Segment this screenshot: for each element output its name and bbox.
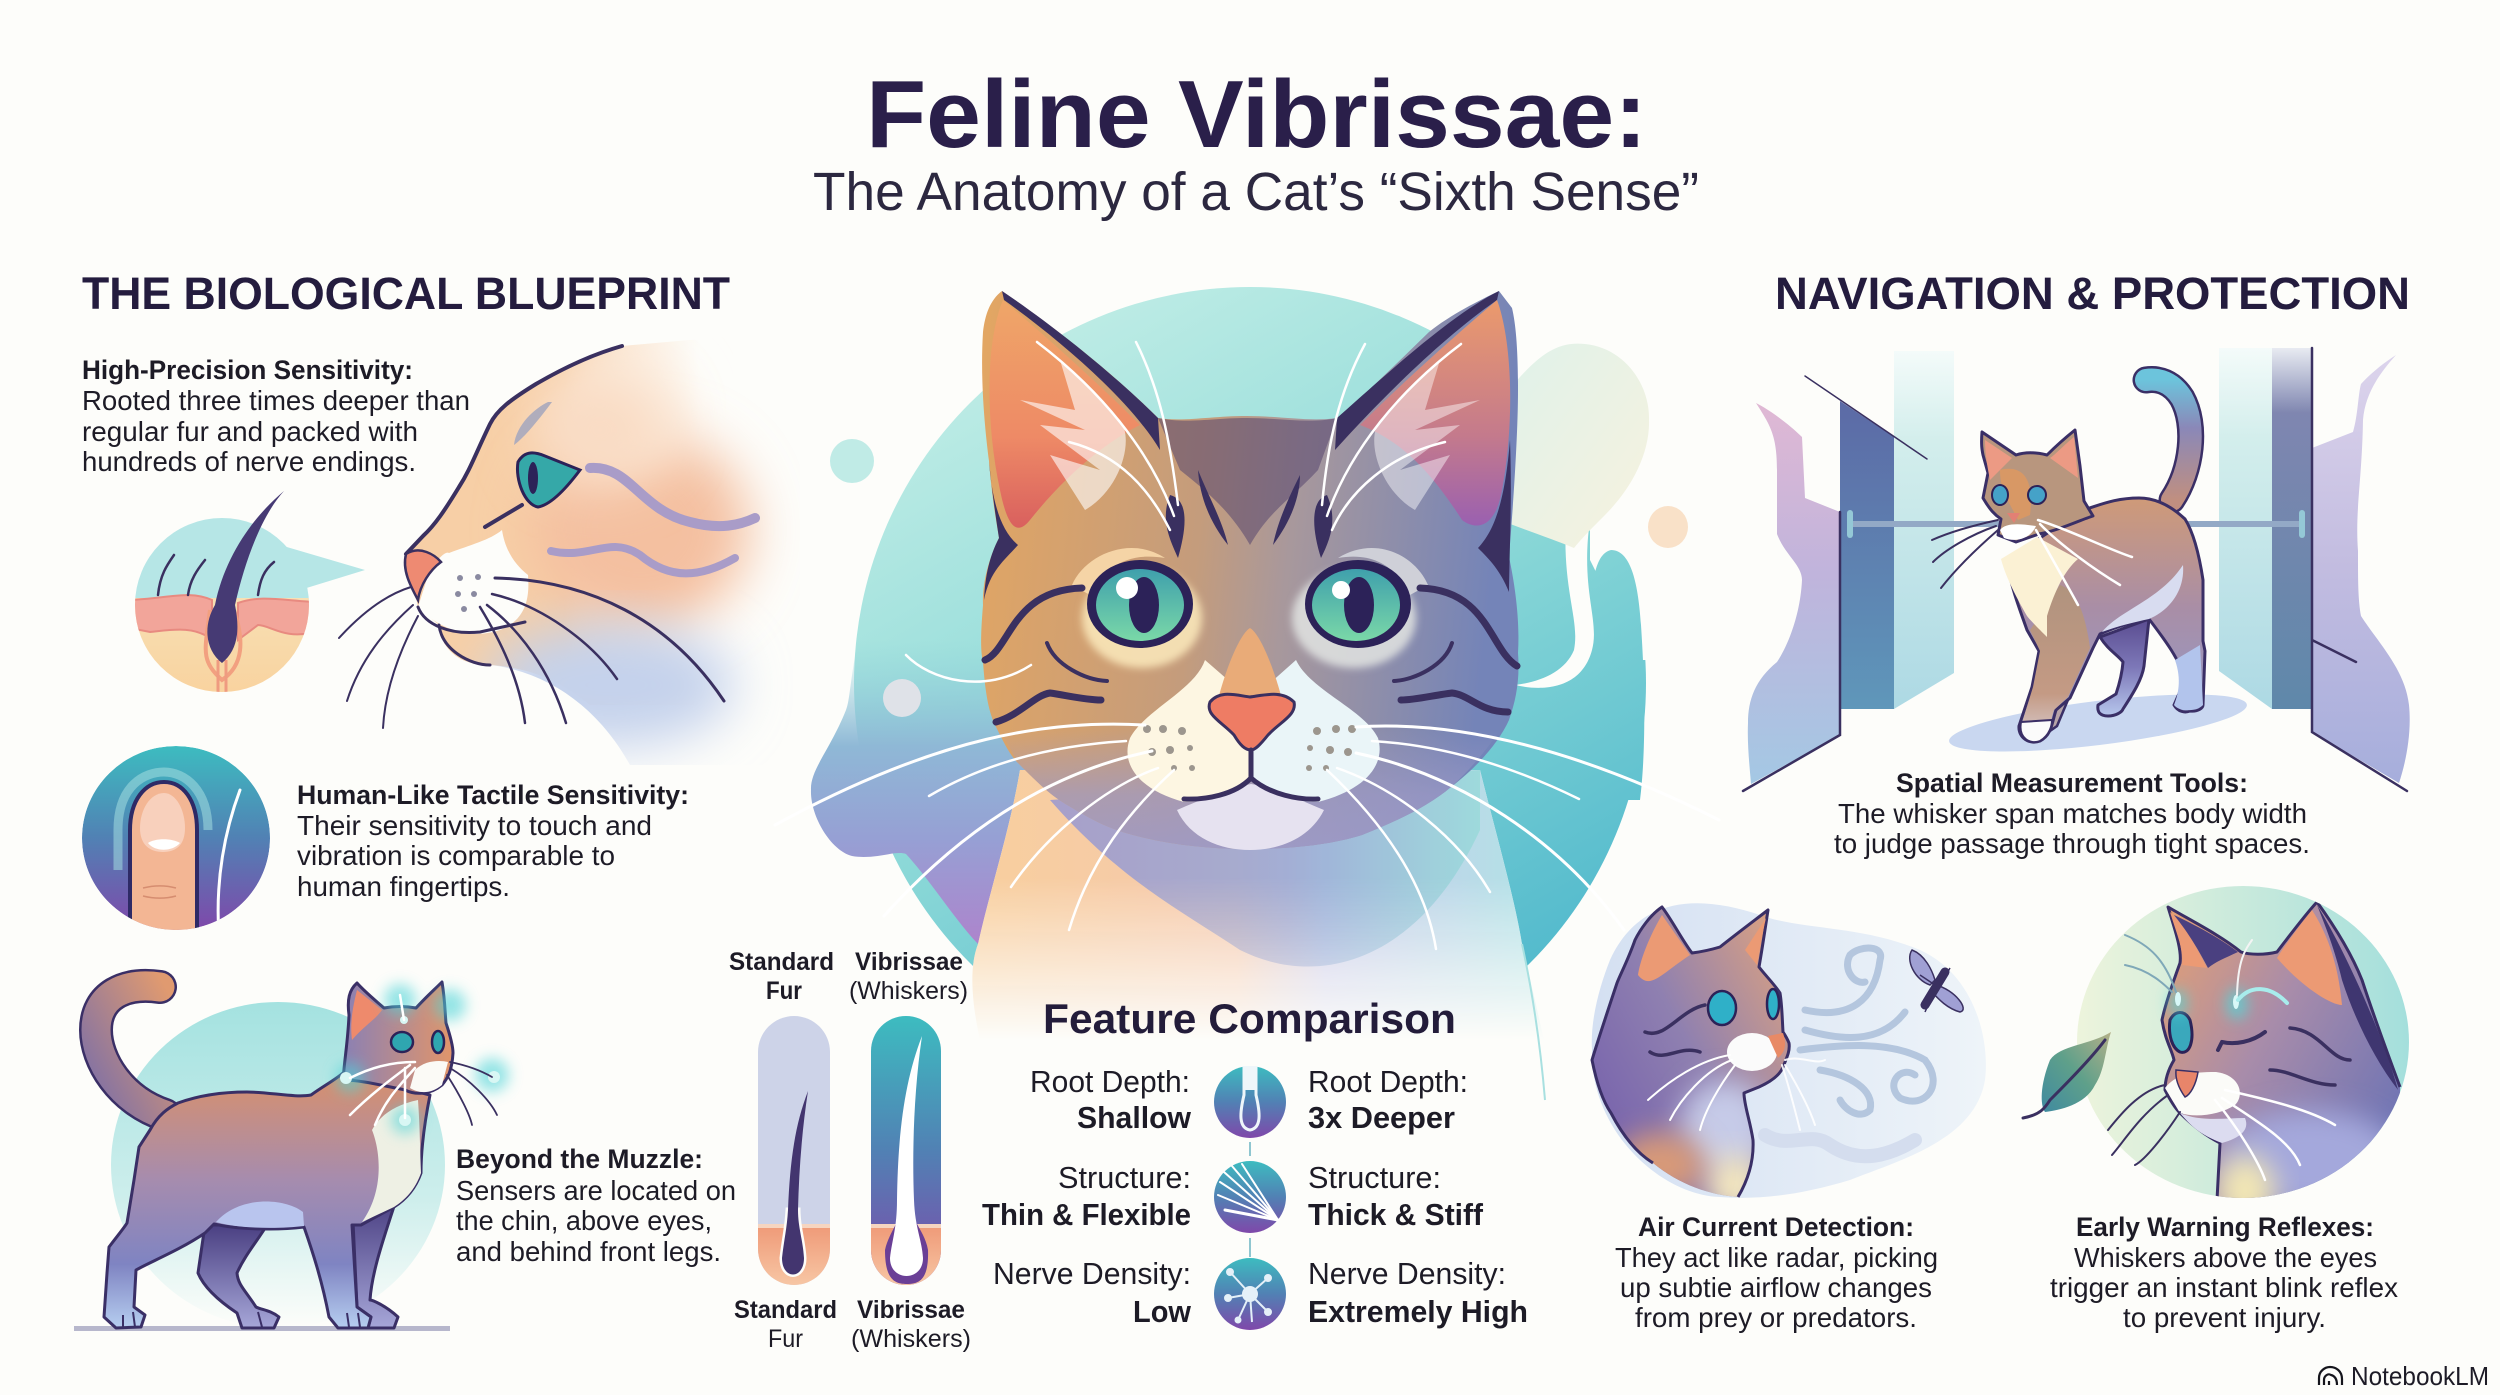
head: [1982, 430, 2093, 542]
text block: high-precision sensitivity: regular fur and packed with: [82, 416, 418, 447]
nose: [2007, 513, 2020, 523]
muzzle white: [418, 530, 528, 634]
row: structure: Thick & Stiff: [1308, 1197, 1484, 1232]
tail: [2146, 380, 2191, 500]
chest cream: [2001, 537, 2078, 637]
left ear dark: [2174, 915, 2238, 968]
icon: whisker root cross-section: [130, 491, 365, 698]
heading: feature comparison: Feature Comparison: [1043, 995, 1456, 1042]
text block: human-like tactile sensitivity: vibration is comparable to: [297, 840, 615, 871]
whiskers: [350, 995, 415, 1125]
bottom labels: [734, 1296, 971, 1353]
row: nerve density: Nerve Density:: [993, 1256, 1191, 1291]
nose bridge: [1216, 628, 1284, 708]
text block: early warning reflexes: [2050, 1212, 2398, 1333]
eyes: [1708, 989, 1779, 1025]
paw toes: [123, 1312, 360, 1327]
vibrissae tube: [871, 1016, 941, 1285]
text block: human-like tactile sensitivity: [297, 780, 689, 902]
far front leg: [352, 1200, 398, 1328]
head outline: [406, 346, 622, 554]
eye surrounds: [1082, 568, 1416, 668]
ears: [2170, 910, 2342, 1005]
muzzle: [1127, 660, 1380, 850]
muzzle: [2000, 524, 2036, 540]
text block: human-like tactile sensitivity: Human-Like Tactile Sensitivity:: [297, 780, 689, 810]
comparison table: [982, 1064, 1528, 1330]
background circle: [2077, 886, 2409, 1198]
illustration: cat in corridor: [1743, 348, 2410, 791]
lower face tint: [1000, 730, 1500, 849]
pale yellow blob: [1500, 344, 1649, 548]
head: [343, 982, 453, 1093]
whiskers: [1648, 1055, 1735, 1130]
face tint: [2000, 469, 2031, 520]
text block: air current detection: They act like radar, picking: [1615, 1242, 1938, 1273]
text block: spatial measurement tools: to judge passage through tight spaces.: [1834, 828, 2310, 859]
belly light: [2102, 565, 2183, 632]
row: nerve density: Extremely High: [1308, 1294, 1528, 1329]
text block: high-precision sensitivity: [82, 355, 470, 477]
heading: navigation and protection: NAVIGATION & PROTECTION: [1775, 268, 2410, 319]
head: [981, 291, 1519, 849]
text block: spatial measurement tools: [1834, 768, 2310, 859]
eyes: [391, 1031, 444, 1053]
text block: early warning reflexes: to prevent injury.: [2123, 1302, 2326, 1333]
notebooklm logo: NotebookLM: [2351, 1361, 2489, 1391]
top labels: Vibrissae: [855, 948, 963, 976]
text block: spatial measurement tools: Spatial Measurement Tools:: [1896, 768, 2248, 798]
measuring bar: [1847, 510, 2305, 538]
decorative dots: [830, 439, 1688, 717]
white channel: [1515, 520, 1594, 688]
text block: air current detection: up subtie airflow changes: [1620, 1272, 1932, 1303]
whiskers left: [1932, 520, 1998, 588]
background patch right: [1590, 340, 1670, 660]
right light column: [2219, 348, 2272, 709]
closed eye: [2218, 1032, 2265, 1050]
open eye: [2169, 1012, 2192, 1052]
hair shaft: [207, 491, 284, 663]
tail: [96, 986, 165, 1115]
ground line: [74, 1326, 450, 1331]
row: root depth: [1030, 1064, 1468, 1138]
leaf: [2023, 1032, 2111, 1118]
text block: human-like tactile sensitivity: Their sensitivity to touch and: [297, 810, 652, 841]
glow points: [335, 984, 509, 1134]
text block: high-precision sensitivity: High-Precision Sensitivity:: [82, 355, 413, 385]
bottom labels: (Whiskers): [851, 1325, 971, 1353]
text block: air current detection: Air Current Detection:: [1638, 1212, 1914, 1242]
purple blob: [811, 640, 1040, 944]
forehead markings: [1158, 418, 1337, 558]
text block: beyond the muzzle: the chin, above eyes,: [456, 1205, 712, 1236]
top labels: Fur: [766, 977, 802, 1005]
muzzle: [1727, 1033, 1777, 1071]
body: [104, 1073, 430, 1328]
paw: [2021, 720, 2052, 742]
text block: high-precision sensitivity: Rooted three times deeper than: [82, 385, 470, 416]
far hind leg: [198, 1225, 279, 1328]
row: structure: Structure:: [1308, 1160, 1441, 1195]
left outer wall: [1748, 403, 1840, 784]
eyes: [1992, 485, 2046, 505]
left ear: [989, 300, 1140, 528]
text block: beyond the muzzle: [456, 1144, 736, 1267]
ears: [1638, 915, 1766, 981]
nose: [405, 550, 441, 600]
icon: fingertip: [82, 746, 270, 950]
jaw line: [418, 607, 525, 665]
background blob: [1592, 903, 1986, 1198]
whiskers above eyes: [2125, 935, 2252, 995]
top labels: Standard: [729, 948, 834, 976]
nose: [1209, 694, 1294, 750]
text block: beyond the muzzle: Beyond the Muzzle:: [456, 1144, 703, 1174]
fly: [1910, 950, 1963, 1012]
left dark column: [1840, 401, 1894, 709]
far hind leg: [2098, 619, 2149, 716]
speech pointer: [280, 545, 365, 590]
eye: [485, 402, 580, 527]
mouth: [1184, 750, 1318, 799]
text block: early warning reflexes: trigger an instant blink reflex: [2050, 1272, 2398, 1303]
whiskers: [2108, 1085, 2180, 1165]
bottom labels: Vibrissae: [857, 1296, 965, 1324]
illustration: central cat portrait: [775, 287, 1719, 1110]
text block: air current detection: [1615, 1212, 1938, 1333]
nose: [2176, 1070, 2198, 1097]
row: root depth: 3x Deeper: [1308, 1100, 1455, 1135]
right ear: [1360, 300, 1510, 526]
text block: beyond the muzzle: Sensers are located on: [456, 1175, 736, 1206]
ear outlines: [984, 291, 1511, 600]
right dark column: [2272, 348, 2312, 709]
illustration: early warning reflexes: [2023, 886, 2409, 1225]
top labels: [729, 948, 968, 1005]
right eye: [1305, 560, 1411, 648]
head shape: [412, 341, 780, 674]
near leg tint: [2021, 585, 2090, 740]
whiskers: [775, 342, 1719, 949]
stripes: [2270, 1028, 2350, 1085]
cat outline: [1592, 907, 1789, 1197]
title: Feline Vibrissae:: [866, 61, 1647, 168]
text block: spatial measurement tools: The whisker span matches body width: [1838, 798, 2307, 829]
heading: the biological blueprint: THE BIOLOGICAL BLUEPRINT: [82, 268, 730, 319]
row: root depth: Shallow: [1077, 1100, 1192, 1135]
row: nerve density: [993, 1256, 1528, 1330]
muzzle: [2165, 1072, 2240, 1115]
row: nerve density: Nerve Density:: [1308, 1256, 1506, 1291]
illustration: cat profile: [339, 340, 800, 747]
illustration: air current detection: [1590, 900, 1986, 1215]
neck and chest: [485, 623, 735, 747]
chest: [972, 770, 1560, 1110]
bottom labels: Standard: [734, 1296, 837, 1324]
row: structure: [982, 1160, 1484, 1233]
structural lines: [1743, 348, 2407, 791]
standard fur tube: [758, 1016, 830, 1285]
stripes: [1645, 1005, 1705, 1055]
wind swirls: [1765, 948, 1933, 1156]
bottom labels: Fur: [768, 1325, 803, 1353]
text block: human-like tactile sensitivity: human fingertips.: [297, 871, 510, 902]
whisker pores: [455, 574, 481, 612]
row: structure: Thin & Flexible: [982, 1197, 1191, 1232]
left eye: [1087, 560, 1193, 648]
subtitle: The Anatomy of a Cat’s “Sixth Sense”: [813, 162, 1699, 222]
chest light: [362, 1100, 421, 1222]
text block: early warning reflexes: Whiskers above the eyes: [2074, 1242, 2377, 1273]
row: structure: Structure:: [1058, 1160, 1191, 1195]
teal finger shape: [1560, 550, 1644, 800]
text block: high-precision sensitivity: hundreds of nerve endings.: [82, 446, 416, 477]
top labels: (Whiskers): [849, 977, 968, 1005]
far front leg: [2040, 695, 2070, 738]
muzzle: [410, 1061, 448, 1092]
diagram: fur vs whisker tubes: [729, 948, 971, 1353]
left light column: [1894, 351, 1954, 709]
row: root depth: Root Depth:: [1030, 1064, 1190, 1099]
whiskers: [339, 578, 724, 728]
cat: [2160, 902, 2402, 1198]
illustration: standing cat with glow points: [74, 982, 509, 1331]
nose: [1768, 1033, 1785, 1058]
connector: [1249, 1142, 1251, 1257]
chin: [2180, 1113, 2246, 1143]
row: nerve density: Low: [1133, 1294, 1192, 1329]
row: root depth: Root Depth:: [1308, 1064, 1468, 1099]
whisker dots: [1143, 725, 1356, 771]
text block: beyond the muzzle: and behind front legs.: [456, 1236, 721, 1267]
fur stripes on cheeks: [985, 588, 1517, 722]
ear inner: [1985, 437, 2078, 480]
dark side band: [2317, 905, 2398, 1090]
ear inner: [351, 990, 382, 1040]
tabby stripes: [551, 468, 755, 573]
cat: [1594, 909, 1788, 1197]
hind leg light: [2174, 645, 2203, 710]
text block: early warning reflexes: Early Warning Reflexes:: [2076, 1212, 2374, 1242]
text block: air current detection: from prey or predators.: [1635, 1302, 1917, 1333]
whiskers right: [2036, 520, 2132, 605]
body: [2006, 498, 2205, 742]
glow points: [2169, 988, 2287, 1020]
brow fur: [1072, 548, 1428, 595]
right outer wall: [2312, 355, 2410, 783]
belly light: [216, 1202, 304, 1228]
teal circle: [111, 1002, 445, 1328]
background teal circle: [854, 287, 1646, 1079]
floor shadow: [1946, 683, 2250, 763]
